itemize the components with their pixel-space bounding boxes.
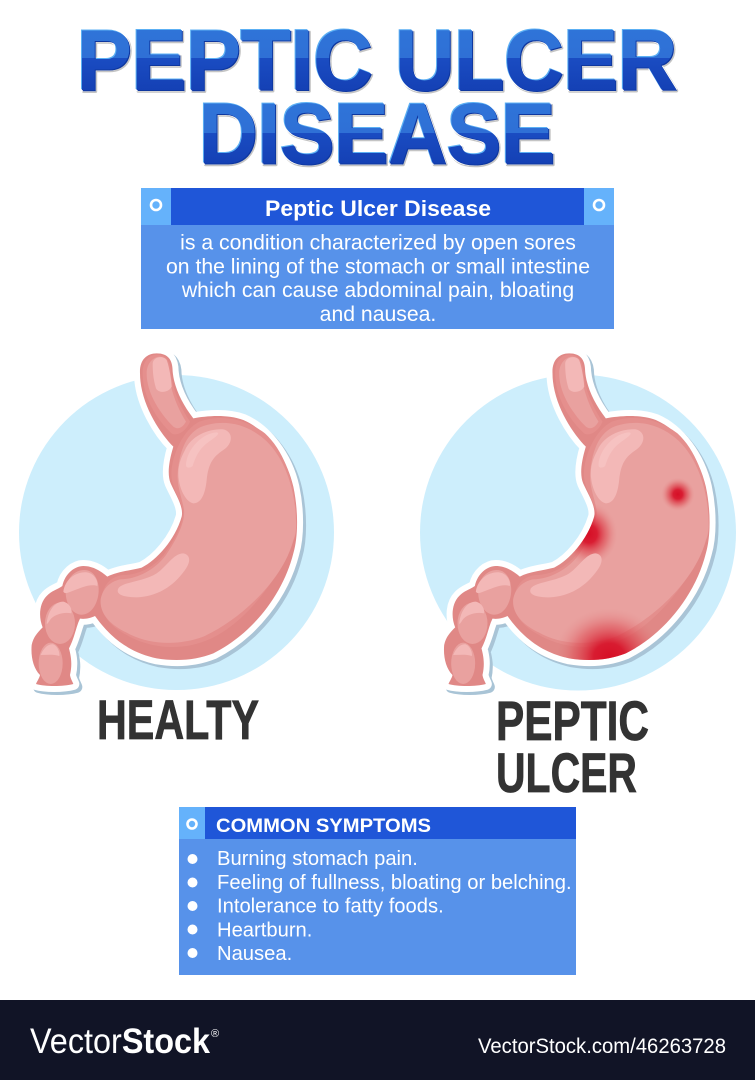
title: DISEASE [200,88,556,183]
highlight [591,429,643,503]
symptoms heading: COMMON SYMPTOMS [216,815,431,837]
illustration: healthy stomach [31,353,300,689]
title: DISEASE [199,87,555,182]
symptoms list: Intolerance to fatty foods. [217,896,444,918]
duodenum [451,570,511,684]
registered mark: ® [211,1028,219,1040]
watermark logo: VectorStock [30,1022,210,1061]
title: DISEASE [200,88,556,184]
symptoms list [188,848,572,965]
definition text: and nausea. [320,303,436,326]
highlight [178,429,231,503]
title [76,12,678,184]
title: PEPTIC ULCER [78,15,678,110]
label: peptic ulcer [496,689,649,804]
title: DISEASE [198,86,554,181]
panel: common symptoms [179,807,576,975]
symptoms list: Burning stomach pain. [217,848,418,870]
symptoms list: Feeling of fullness, bloating or belching. [217,872,572,894]
title: PEPTIC ULCER [76,12,676,108]
title: PEPTIC ULCER [77,14,677,108]
label: peptic ulcer: ULCER [496,741,637,804]
background circle: peptic ulcer [420,374,736,690]
definition text: which can cause abdominal pain, bloating [181,279,574,302]
title: PEPTIC ULCER [77,14,677,108]
definition heading: Peptic Ulcer Disease [265,196,491,221]
symptoms list: Heartburn. [217,920,312,942]
watermark url: VectorStock.com/46263728 [478,1035,726,1058]
symptoms list: Nausea. [217,943,292,965]
illustration: peptic ulcer stomach [444,353,713,705]
footer bar [0,1000,755,1080]
label: peptic ulcer: PEPTIC [496,689,649,752]
definition text: is a condition characterized by open sores [180,232,576,254]
ulcer spots [562,480,692,660]
definition text [166,232,590,326]
background circle: healthy [19,375,334,690]
title: DISEASE [199,87,555,182]
definition text: on the lining of the stomach or small intestine [166,256,590,278]
label: healthy: HEALTY [97,688,259,751]
panel: definition [141,188,614,329]
title: PEPTIC ULCER [78,14,678,110]
duodenum [39,570,99,684]
